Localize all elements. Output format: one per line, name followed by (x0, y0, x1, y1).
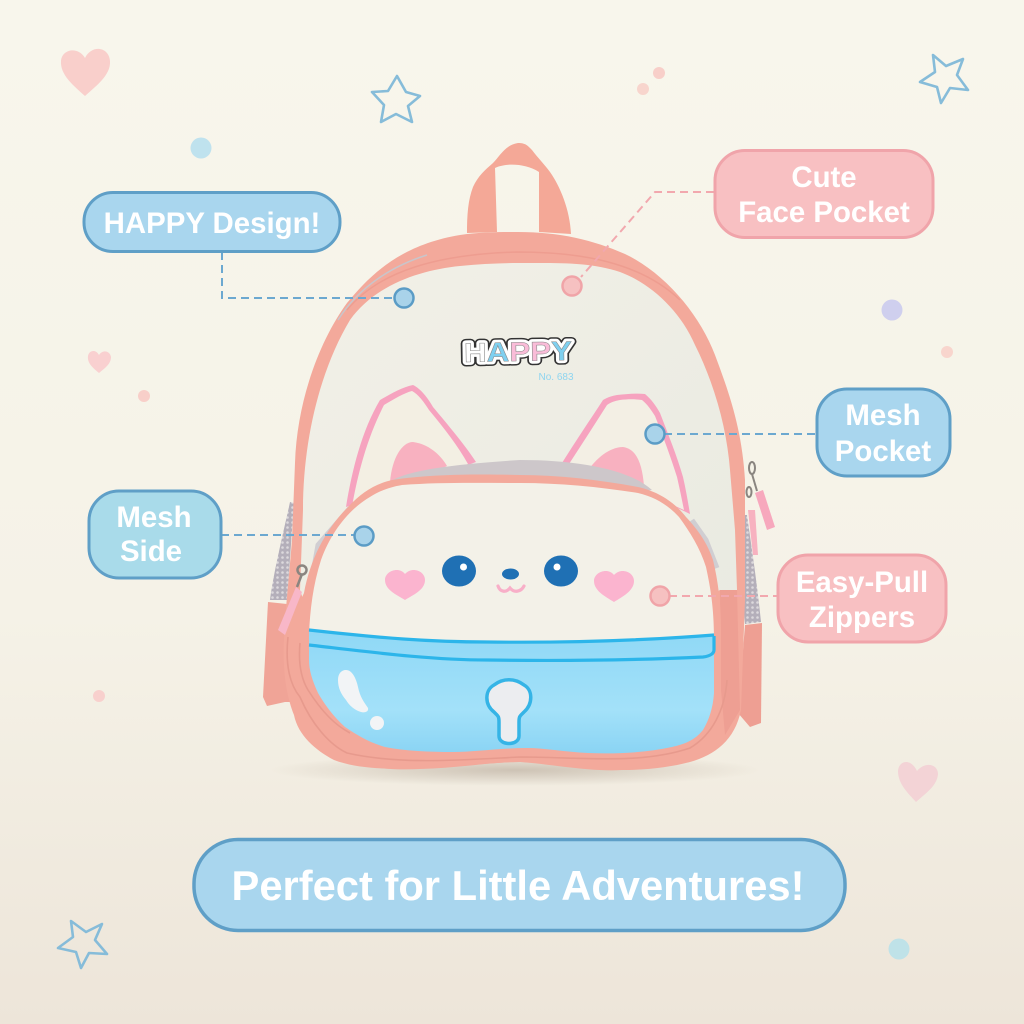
marker: Mesh Pocket (646, 424, 664, 444)
callout: Cute Face Pocket: Face Pocket (738, 196, 910, 229)
mouth (498, 586, 524, 591)
front pocket cream face (309, 483, 714, 660)
marker: Mesh Side (354, 526, 374, 546)
leader line: HAPPY Design (222, 252, 396, 298)
marker: Easy-Pull Zippers (650, 586, 670, 606)
left ear (346, 385, 476, 507)
right ear (562, 394, 690, 514)
pocket layered seams (287, 637, 727, 761)
leader line: Mesh Side (221, 534, 355, 536)
callout: HAPPY Design (84, 192, 340, 252)
side pocket right (736, 515, 762, 727)
side zipper strips (310, 508, 717, 590)
glossy highlights (338, 670, 368, 712)
keyhole (487, 680, 531, 744)
leader line: Cute Face Pocket (581, 192, 714, 277)
blue lower pocket (309, 630, 714, 753)
top handle (467, 143, 571, 234)
face eyes and nose (442, 556, 476, 586)
callout: Easy-Pull Zippers: Zippers (809, 601, 915, 634)
leader line: Easy-Pull Zippers (669, 595, 777, 597)
tagline banner (194, 840, 845, 930)
side pocket left (263, 502, 294, 706)
leader line: Mesh Pocket (664, 433, 816, 435)
front pocket piping (284, 475, 721, 770)
zipper pulls (278, 462, 775, 635)
cream front panel (300, 263, 737, 650)
blue stripes (309, 630, 714, 642)
decorative hearts, stars and dots (58, 49, 968, 968)
callout: Cute Face Pocket (715, 150, 933, 238)
callout: Easy-Pull Zippers: Easy-Pull (796, 566, 928, 599)
cheek hearts (385, 570, 425, 600)
main body with pink piping (284, 232, 745, 770)
callout: Mesh Side: Mesh (116, 501, 192, 534)
backpack illustration (263, 143, 775, 786)
callout: HAPPY Design: HAPPY Design! (104, 207, 320, 240)
tagline banner: Perfect for Little Adventures! (232, 862, 804, 909)
model number: No. 683 (538, 372, 574, 383)
piping crease (347, 252, 680, 310)
mesh zipper band (385, 460, 652, 492)
callout: Mesh Side (89, 491, 221, 578)
callout: Mesh Pocket: Mesh (845, 399, 921, 432)
HAPPY logo: HAPPY (464, 336, 572, 368)
marker: HAPPY Design (394, 288, 414, 308)
callout: Cute Face Pocket: Cute (791, 161, 857, 194)
callout: Mesh Pocket: Pocket (835, 435, 931, 468)
HAPPY logo: HAPPY (464, 336, 572, 368)
callout: Mesh Side: Side (120, 535, 182, 568)
right seam panel (720, 590, 740, 735)
callout: Mesh Pocket (817, 389, 950, 476)
HAPPY logo: HAPPY (464, 336, 572, 368)
marker: Cute Face Pocket (562, 276, 582, 296)
callout: Easy-Pull Zippers (778, 555, 946, 642)
upper zipper strip (338, 255, 427, 320)
ground shadow (270, 754, 760, 786)
